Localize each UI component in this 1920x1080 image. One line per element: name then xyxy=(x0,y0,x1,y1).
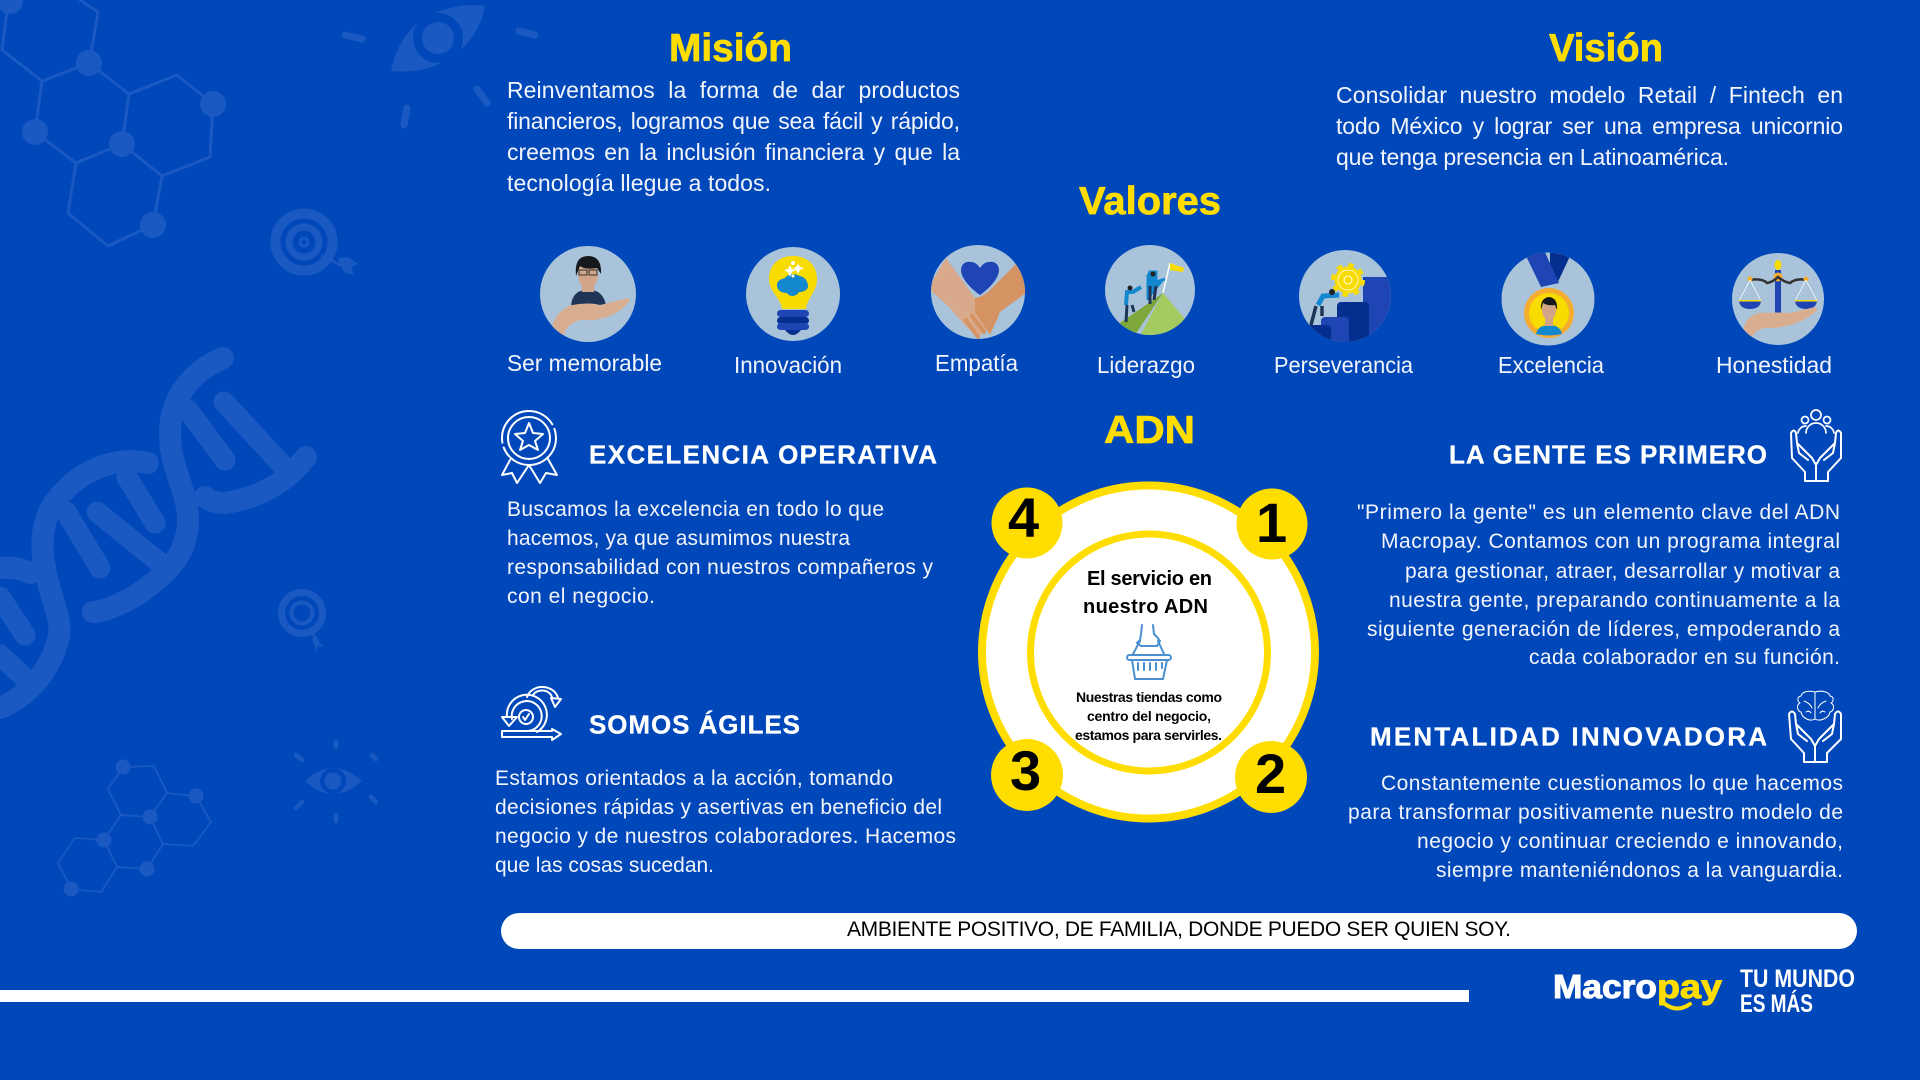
inner ring xyxy=(1030,534,1268,771)
label: ser memorable: Ser memorable xyxy=(507,350,662,376)
label: excelencia: Excelencia xyxy=(1498,352,1604,378)
text block: mentalidad innovadora: Constantemente cuestionamos lo que hacemos xyxy=(1381,772,1843,795)
center caption: estamos para servirles. xyxy=(1075,727,1222,743)
decoration: DNA helix xyxy=(0,358,306,708)
title: Visión: Visión xyxy=(1549,27,1663,70)
icon: innovación xyxy=(746,247,840,341)
banner: ambiente positivo: AMBIENTE POSITIVO, DE FAMILIA, DONDE PUEDO SER QUIEN SOY. xyxy=(847,918,1511,941)
diagram: ADN circle xyxy=(982,486,1315,818)
logo: Macropay xyxy=(1553,968,1723,1008)
icon: empatía xyxy=(928,245,1030,339)
badge 2 xyxy=(1235,741,1307,813)
badge 4 xyxy=(992,486,1062,558)
text block: excelencia operativa: hacemos, ya que asumimos nuestra xyxy=(507,527,850,550)
decoration: molecule lower xyxy=(58,760,211,896)
icon: ribbon award xyxy=(502,411,557,483)
center heading: nuestro ADN xyxy=(1083,596,1208,618)
center caption xyxy=(1075,689,1222,743)
text block: mentalidad innovadora: siempre manteniéndonos a la vanguardia. xyxy=(1436,859,1843,882)
text block: misión xyxy=(507,77,960,196)
text block: la gente es primero: Macropay. Contamos con un programa integral xyxy=(1381,530,1840,553)
label: empatía: Empatía xyxy=(935,350,1018,376)
text block: misión: financieros, logramos que sea fácil y rápido, xyxy=(507,108,960,134)
label: liderazgo: Liderazgo xyxy=(1097,352,1195,378)
text block: la gente es primero: "Primero la gente" es un elemento clave del ADN xyxy=(1357,501,1840,524)
slogan: tu mundo es más xyxy=(1740,965,1855,1018)
center heading: El servicio en xyxy=(1087,568,1212,590)
text block: misión: tecnología llegue a todos. xyxy=(507,170,771,196)
text block: excelencia operativa xyxy=(507,498,934,608)
icon: excelencia xyxy=(1502,250,1594,346)
banner: ambiente positivo xyxy=(501,913,1857,949)
text block: somos ágiles: Estamos orientados a la acción, tomando xyxy=(495,767,893,790)
label: innovación: Innovación xyxy=(734,352,842,378)
logo: Macropay: pay xyxy=(1657,968,1723,1005)
label: perseverancia: Perseverancia xyxy=(1274,352,1413,378)
badge 4: 4 xyxy=(1008,486,1039,549)
text block: misión: Reinventamos la forma de dar productos xyxy=(507,77,960,103)
text block: somos ágiles xyxy=(495,767,956,877)
heading: excelencia operativa: EXCELENCIA OPERATIVA xyxy=(589,440,937,470)
text block: mentalidad innovadora: negocio y continuar creciendo e innovando, xyxy=(1417,830,1843,853)
icon: basket xyxy=(1127,625,1171,679)
icon: perseverancia xyxy=(1299,250,1391,342)
white footer bar xyxy=(0,990,1469,1002)
center heading xyxy=(1083,568,1212,618)
decoration: eye lower xyxy=(296,742,376,821)
text block: mentalidad innovadora xyxy=(1348,772,1843,882)
icon: agile arrows xyxy=(502,687,561,740)
decoration: target lower xyxy=(282,592,325,652)
title: Misión: Misión xyxy=(669,27,792,70)
icon: liderazgo xyxy=(1105,245,1195,345)
text block: excelencia operativa: Buscamos la excelencia en todo lo que xyxy=(507,498,884,521)
title: ADN: ADN xyxy=(1104,409,1195,452)
text block: visión: que tenga presencia en Latinoamérica. xyxy=(1336,144,1729,170)
icon: hands with brain xyxy=(1789,691,1841,762)
text block: mentalidad innovadora: para transformar positivamente nuestro modelo de xyxy=(1348,801,1843,824)
text block: excelencia operativa: con el negocio. xyxy=(507,585,655,608)
heading: mentalidad innovadora: MENTALIDAD INNOVADORA xyxy=(1370,722,1767,752)
slogan: tu mundo es más: ES MÁS xyxy=(1740,989,1813,1018)
text block: la gente es primero: para gestionar, atraer, desarrollar y motivar a xyxy=(1405,560,1840,583)
text block: la gente es primero: siguiente generación de líderes, empoderando a xyxy=(1367,618,1840,641)
badge 3 xyxy=(991,739,1063,811)
text block: somos ágiles: que las cosas sucedan. xyxy=(495,854,714,877)
badge 1: 1 xyxy=(1256,491,1287,554)
text block: somos ágiles: decisiones rápidas y asertivas en beneficio del xyxy=(495,796,942,819)
text block: excelencia operativa: responsabilidad con nuestros compañeros y xyxy=(507,556,934,579)
decoration: target top xyxy=(276,214,358,275)
decoration: eye top xyxy=(345,5,535,125)
slogan: tu mundo es más: TU MUNDO xyxy=(1740,965,1855,993)
text block: misión: creemos en la inclusión financiera y que la xyxy=(507,139,960,165)
text block: somos ágiles: negocio y de nuestros colaboradores. Hacemos xyxy=(495,825,956,848)
text block: la gente es primero xyxy=(1357,501,1840,669)
badge 1 xyxy=(1236,488,1308,560)
text block: visión: todo México y lograr ser una empresa unicornio xyxy=(1336,113,1843,139)
text block: la gente es primero: cada colaborador en su función. xyxy=(1529,646,1840,669)
center caption: centro del negocio, xyxy=(1087,708,1211,724)
decoration: molecule top left xyxy=(0,0,226,246)
text block: visión: Consolidar nuestro modelo Retail / Fintech en xyxy=(1336,82,1843,108)
logo: Macropay: Macro xyxy=(1553,968,1657,1005)
icon: honestidad xyxy=(1732,253,1824,345)
heading: somos ágiles: SOMOS ÁGILES xyxy=(589,710,800,740)
outer ring xyxy=(982,486,1315,818)
badge 2: 2 xyxy=(1255,742,1286,805)
icon: ser memorable xyxy=(540,246,636,342)
heading: la gente es primero: LA GENTE ES PRIMERO xyxy=(1449,440,1767,470)
label: honestidad: Honestidad xyxy=(1716,352,1832,378)
title: Valores: Valores xyxy=(1079,180,1221,223)
badge 3: 3 xyxy=(1010,739,1041,802)
text block: visión xyxy=(1336,82,1843,170)
text block: la gente es primero: nuestra gente, preparando continuamente a la xyxy=(1389,589,1840,612)
center caption: Nuestras tiendas como xyxy=(1076,689,1222,705)
icon: hands with people xyxy=(1791,410,1841,481)
